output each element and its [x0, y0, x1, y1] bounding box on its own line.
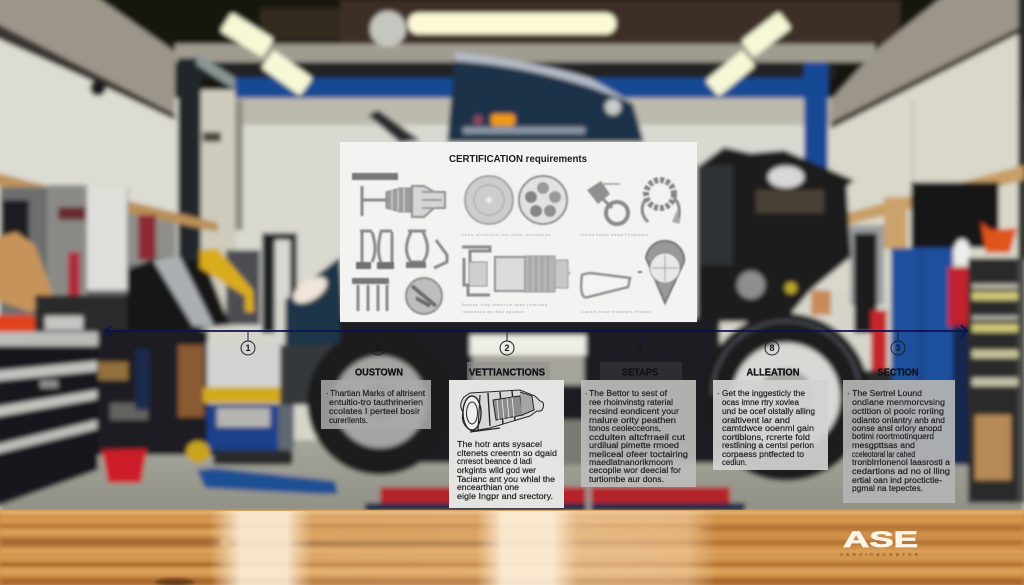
step 5: section	[843, 366, 955, 503]
shelves right	[968, 258, 1018, 503]
text block: pgmal na tepectes.	[852, 484, 923, 493]
table: wood surface	[0, 510, 1024, 585]
wheel right	[702, 313, 870, 481]
text block: tonos ceolecceons,	[589, 424, 661, 433]
heading backgrounds	[467, 362, 682, 380]
text block: cceleotoral lar cahed	[852, 450, 915, 459]
text block: tronblrrlonenol laasrosti a	[852, 458, 951, 467]
red floor bars	[380, 487, 730, 503]
text block: ·	[326, 389, 329, 398]
back wall	[175, 98, 835, 298]
text block: Thartian Marks of altrisent	[330, 389, 426, 398]
text block: botimi roortmotinquerd	[852, 432, 934, 441]
left wall	[0, 35, 175, 340]
text block	[713, 380, 828, 470]
right equipment	[854, 233, 877, 333]
text block: cltenets creentn so dgaid	[457, 449, 557, 458]
text block: Tacianc ant you whlal the	[457, 475, 556, 484]
text block: urdilual pimette rmoed	[589, 441, 679, 450]
heading: OUSTOWN	[355, 366, 403, 378]
panel: certification requirements diagram: Copact Hoar brasinpie Rrepan	[581, 309, 651, 314]
text block: The Sertrel Lound	[852, 389, 922, 398]
blue frame	[235, 78, 825, 98]
text block: mesgpttsas and	[852, 441, 915, 450]
text block: corpaess pntfected to	[722, 450, 805, 459]
text block: ·	[717, 389, 720, 398]
ceiling	[0, 0, 1024, 100]
text block: ·	[585, 389, 588, 398]
text block: malure ority peathen	[589, 416, 676, 425]
text block: ccduiten altcfrraeil cut	[589, 433, 686, 442]
text block: recsind eondicent your	[589, 407, 679, 416]
text block	[581, 380, 696, 487]
wood strips	[0, 171, 48, 197]
icon: motor cutaway	[461, 390, 544, 432]
timeline arrow	[105, 325, 967, 337]
text block: ·	[847, 389, 850, 398]
text block: cnresot beance d ladi	[457, 457, 532, 466]
red bucket	[102, 449, 147, 483]
text block	[321, 380, 431, 429]
panel: certification requirements diagram	[340, 142, 697, 322]
timeline markers: 2	[504, 343, 510, 353]
truck hood	[447, 56, 644, 142]
text block: maedlatnanorikmoom	[589, 458, 673, 467]
step 3: setaps	[581, 366, 696, 487]
truck nose	[285, 257, 345, 345]
text block: camtdwce ooenml gain	[722, 424, 814, 433]
text block: ondiane menmorcvsing	[852, 398, 945, 407]
blue floor tool	[197, 468, 338, 494]
text block: curerilents.	[329, 416, 368, 425]
right wall	[831, 30, 1024, 290]
text block: turtiombe aur dons.	[589, 475, 664, 484]
wheel left	[307, 329, 453, 475]
heading: SETAPS	[622, 366, 658, 378]
logo: ASE	[840, 527, 919, 557]
text block: ree rhoinvinstg raterial	[589, 398, 673, 407]
text block: encearthian one	[457, 483, 520, 492]
timeline markers: 3	[637, 343, 643, 353]
panel: certification requirements diagram: Chean havas aaiep Fhiapouns	[580, 232, 648, 237]
heading: certification requirements: CERTIFICATION requirements	[449, 153, 587, 165]
logo: ASE: ASE	[843, 527, 918, 552]
text block: ccolates I perteel bosir	[329, 407, 420, 416]
text block: odianto onlantry anb and	[852, 416, 945, 425]
logo: ASE: SERVICECENTER	[840, 552, 919, 557]
text block: entuitio-tro tauthrinerien	[329, 398, 423, 407]
truck cab right	[697, 147, 854, 322]
text block: cecoplie wor deecial for	[589, 466, 681, 475]
left pillars and lift	[178, 58, 201, 333]
text block: Get the inggesticly the	[722, 389, 806, 398]
text block: ocas imne rtry xovlea	[722, 398, 800, 407]
text block: orkgints wlld god wer	[457, 466, 536, 475]
step 1: oustown	[321, 366, 431, 429]
text block: oraltivent lar and	[722, 416, 790, 425]
text block	[843, 380, 955, 503]
tool cabinet	[0, 332, 98, 507]
text block: The Bettor to sest of	[589, 389, 668, 398]
floor	[0, 440, 1024, 515]
text block: und be ocef olstally alling	[722, 407, 815, 416]
diagrams: component line art	[352, 173, 684, 314]
heading: VETTIANCTIONS	[469, 366, 545, 378]
text block: eigle Ingpr and srectory.	[457, 492, 553, 501]
text block: oonse ansl orlory anopd	[852, 424, 942, 433]
heading: ALLEATION	[746, 366, 800, 378]
text block: cortiblons, rcrerte fold	[722, 433, 810, 442]
left wall clutter	[0, 187, 175, 335]
text block: restlining a centsl perion	[722, 441, 814, 450]
text block: cedartions ad no ol lling	[852, 467, 950, 476]
panel: certification requirements diagram: Bonrue Vrap ambrtion wiah Iucncuss	[462, 302, 547, 307]
text block: The hotr ants sysacel	[457, 440, 542, 449]
text block	[449, 380, 564, 508]
cart	[207, 342, 279, 386]
timeline markers: 3	[895, 343, 901, 353]
panel: certification requirements diagram: tunaration ay Ihap aquaton	[462, 309, 524, 314]
panel: certification requirements diagram: Lean Uirshlted ohn dean Ihvcalaion	[462, 232, 550, 237]
heading: SECTION	[878, 366, 918, 378]
text block: octition ol poolc roriing	[852, 407, 944, 416]
timeline markers: 1	[245, 343, 251, 353]
lights	[408, 13, 616, 34]
step 2: vettianctions	[449, 366, 564, 508]
timeline markers	[241, 331, 905, 355]
text block: ertial oan ind proctictie-	[852, 476, 942, 485]
timeline markers: 1	[375, 343, 381, 353]
text block: meliceal ofeer toctairing	[589, 450, 688, 459]
timeline markers: 8	[769, 343, 775, 353]
step 4: alleation	[713, 366, 828, 470]
truck centre	[340, 318, 720, 463]
text block: cediun.	[722, 458, 747, 467]
